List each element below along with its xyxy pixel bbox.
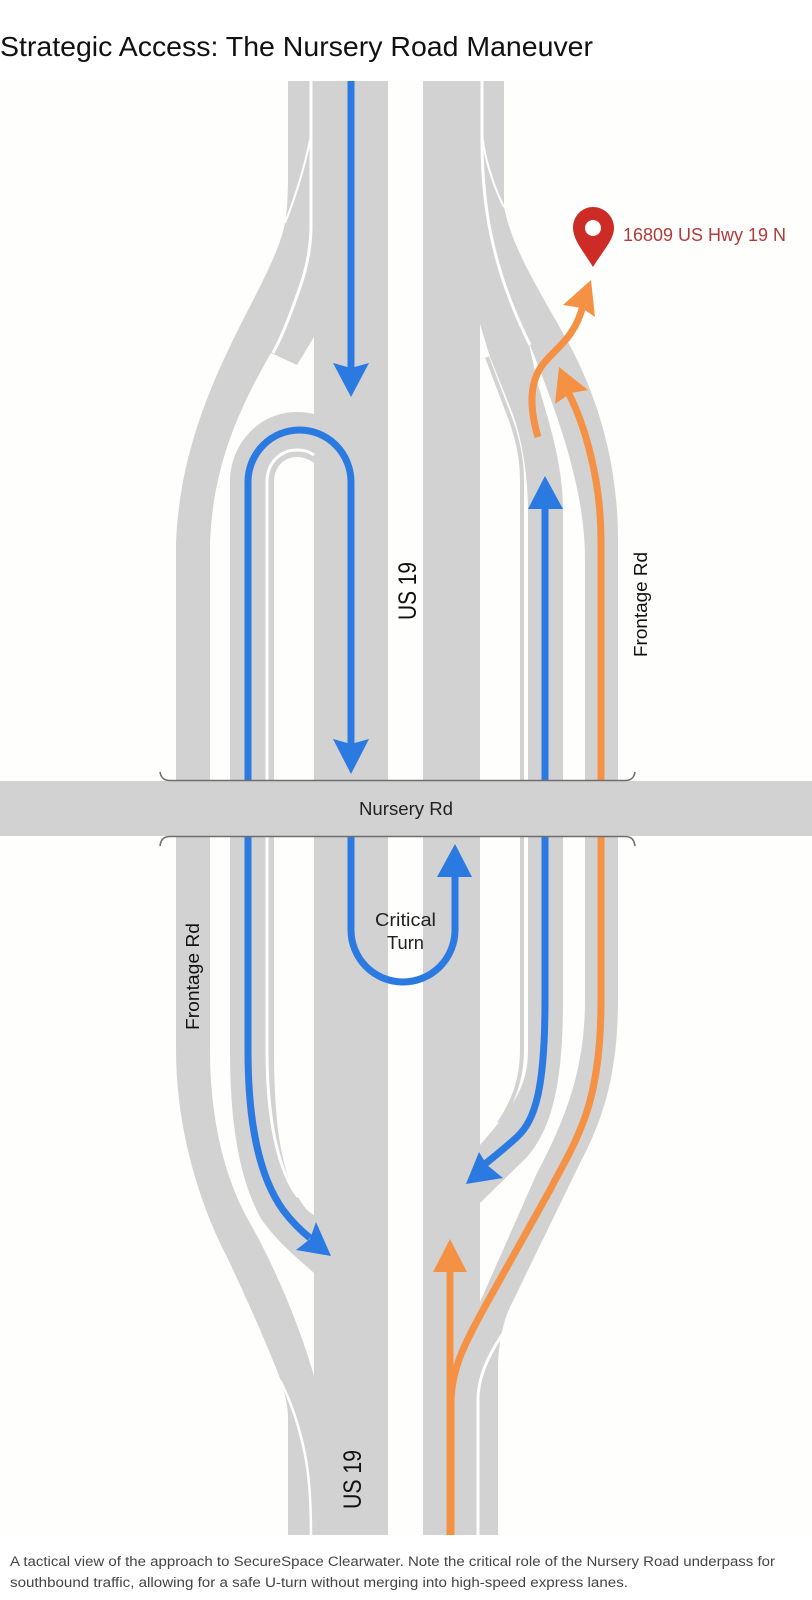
right frontage road and ramp bbox=[479, 81, 618, 1535]
caption: southbound traffic, allowing for a safe U-turn without merging into high-speed express lanes. bbox=[10, 1575, 628, 1590]
orange route: northbound with fork bbox=[433, 790, 601, 1535]
destination address: 16809 US Hwy 19 N bbox=[623, 225, 786, 245]
label: Nursery Rd: Nursery Rd bbox=[359, 799, 453, 819]
label: Frontage Rd left: Frontage Rd bbox=[183, 923, 203, 1030]
caption: A tactical view of the approach to SecureSpace Clearwater. Note the critical role of the Nursery Road underpass for bbox=[10, 1554, 776, 1569]
orange route: right frontage arrow bbox=[555, 367, 601, 830]
blue route: northbound ramp arrow bbox=[528, 476, 563, 790]
Nursery Rd crossing road bbox=[0, 781, 812, 836]
label: US 19 lower: US 19 bbox=[339, 1450, 367, 1509]
left frontage road bbox=[176, 81, 314, 1535]
title: Strategic Access: The Nursery Road Maneuver bbox=[0, 31, 593, 62]
road network bbox=[176, 81, 618, 1535]
label: Frontage Rd right: Frontage Rd bbox=[631, 552, 651, 657]
blue route: critical U-turn under Nursery Rd bbox=[351, 837, 472, 982]
thin median strip in wedge bbox=[487, 357, 522, 1123]
blue route: U-turn ramp down to Nursery Rd bbox=[248, 430, 369, 790]
label: Critical Turn: Turn bbox=[387, 933, 424, 953]
blue route: southbound to exit arrow bbox=[333, 81, 369, 397]
overpass brackets bbox=[160, 772, 635, 846]
blue route: continuing southbound merge arrow bbox=[248, 830, 331, 1256]
northbound US 19 bbox=[423, 81, 479, 1535]
wedge: gap between northbound road and ramp bbox=[480, 324, 528, 1145]
label: Critical Turn bbox=[375, 910, 436, 953]
white lane lines bbox=[267, 81, 530, 1535]
left U-turn ramp bbox=[230, 412, 314, 1273]
southbound US 19 bbox=[314, 81, 388, 1535]
blue route: ramp merge arrow bbox=[466, 830, 545, 1184]
label: Critical Turn: Critical bbox=[375, 910, 436, 930]
wedge: gap between ramp and right frontage road bbox=[480, 340, 585, 1302]
orange route: exit arrow to destination bbox=[532, 280, 595, 437]
caption bbox=[10, 1554, 776, 1590]
label: US 19 upper: US 19 bbox=[394, 562, 422, 620]
icon: location pin bbox=[573, 207, 614, 267]
